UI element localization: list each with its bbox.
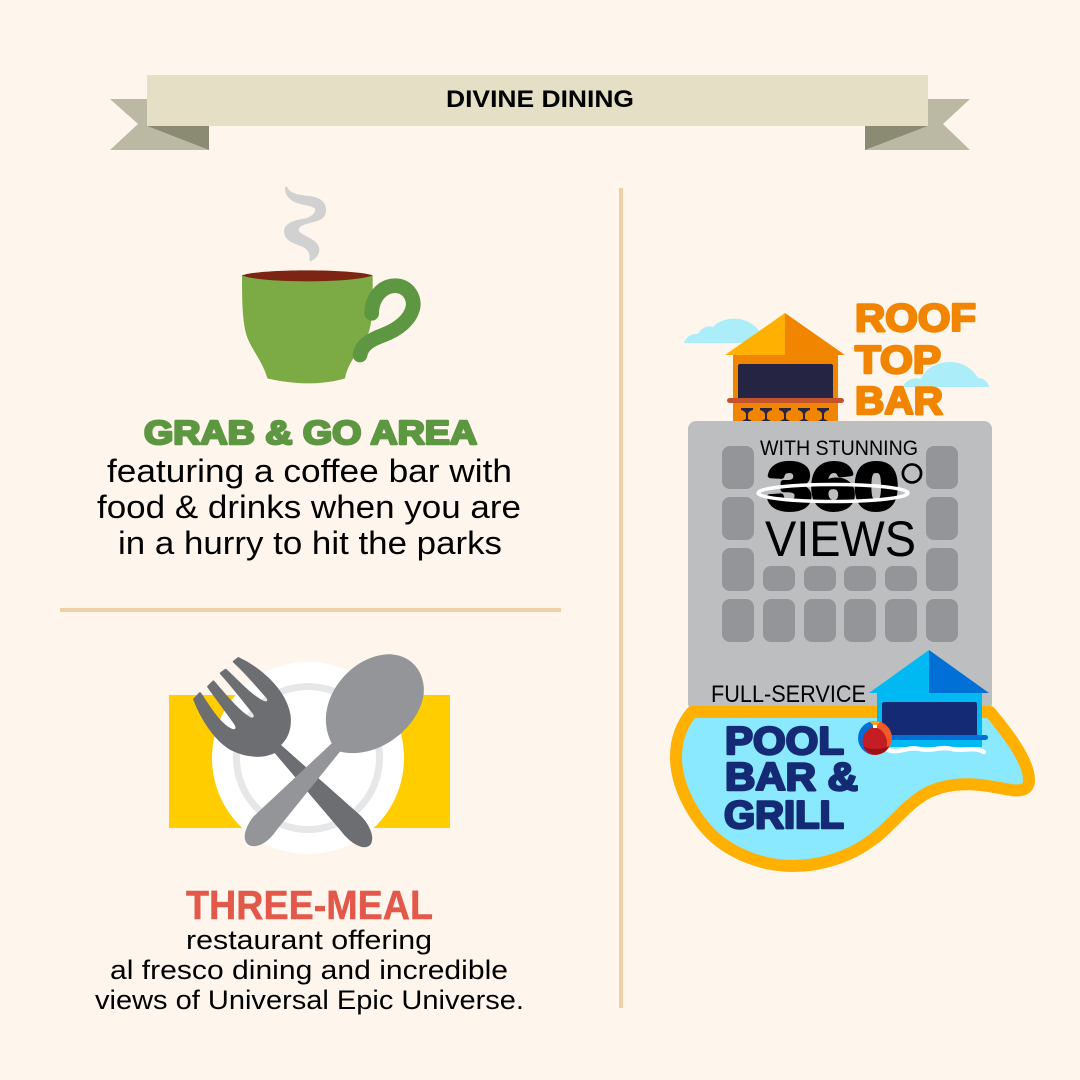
text: coffee bar description: featuring a coffee bar with	[107, 453, 512, 489]
icon: cloud left	[684, 319, 760, 343]
heading: pool bar and grill	[724, 720, 858, 837]
heading: rooftop bar: TOP	[855, 339, 941, 382]
pool	[676, 712, 1029, 866]
panel: grab and go	[97, 188, 521, 561]
text: full-service: FULL-SERVICE	[711, 681, 866, 708]
text: with stunning 360 views: 360	[768, 450, 898, 523]
panel: three-meal restaurant	[95, 654, 524, 1015]
text: restaurant description: restaurant offering	[186, 925, 432, 955]
title: DIVINE DINING	[446, 86, 634, 113]
heading: pool bar and grill: GRILL	[724, 794, 844, 837]
text: with stunning 360 views	[758, 437, 928, 567]
icon: plate with fork and spoon	[169, 654, 450, 854]
heading: rooftop bar: BAR	[855, 380, 943, 423]
text: with stunning 360 views: °	[896, 446, 928, 535]
icon: rooftop bar hut	[725, 313, 845, 423]
text: restaurant description	[95, 925, 524, 1015]
icon: beach ball	[858, 721, 892, 755]
heading: pool bar and grill: BAR &	[725, 756, 858, 799]
heading: three-meal: THREE-MEAL	[186, 882, 433, 928]
icon: coffee cup	[242, 188, 413, 383]
text: coffee bar description: in a hurry to hit the parks	[118, 525, 502, 561]
heading: rooftop bar	[855, 297, 976, 423]
text: restaurant description: views of Universal Epic Universe.	[95, 985, 524, 1015]
text: coffee bar description	[97, 453, 521, 561]
text: with stunning 360 views: WITH STUNNING	[760, 437, 918, 460]
text: with stunning 360 views: VIEWS	[765, 511, 916, 567]
heading: pool bar and grill: POOL	[725, 720, 844, 763]
heading: grab and go area: GRAB & GO AREA	[144, 414, 477, 451]
building	[688, 421, 992, 711]
icon: pool bar hut	[869, 650, 989, 752]
text: restaurant description: al fresco dining and incredible	[110, 955, 508, 985]
panel: rooftop bar and pool	[676, 297, 1029, 866]
title banner	[110, 75, 970, 150]
text: coffee bar description: food & drinks when you are	[97, 489, 521, 525]
icon: cloud right	[903, 362, 989, 387]
heading: rooftop bar: ROOF	[855, 297, 976, 340]
